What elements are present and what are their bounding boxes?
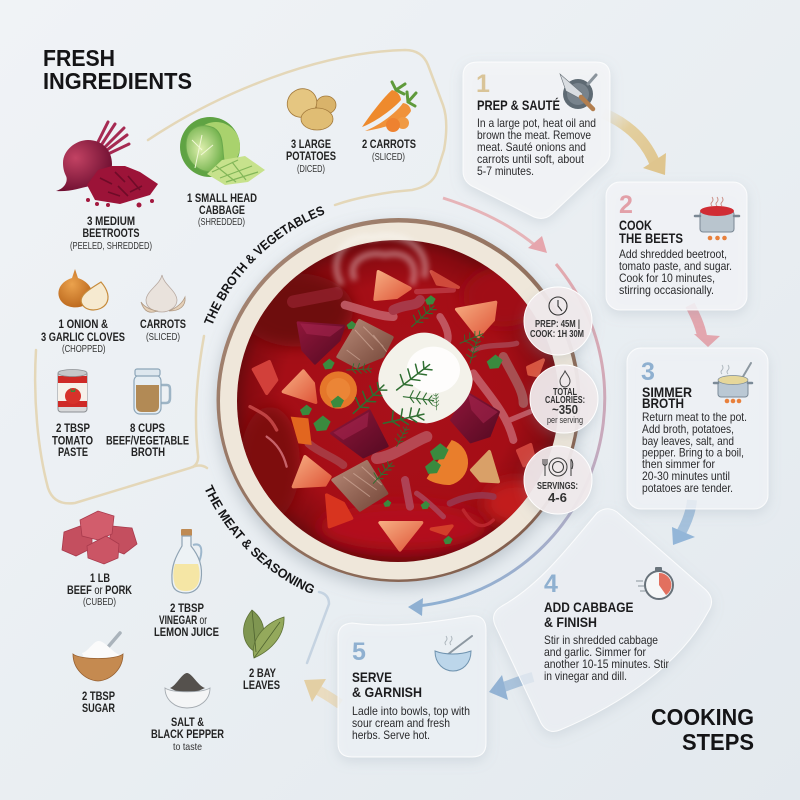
title: cooking steps — [651, 704, 754, 755]
frame: meat and seasoning (blue line) — [307, 592, 329, 663]
icon: beef cubes — [62, 511, 137, 564]
label: beetroots: 3 MEDIUM — [87, 214, 135, 228]
step card 1 — [463, 62, 610, 218]
ingredient: beef or pork — [62, 511, 137, 608]
ingredient: tomato paste — [52, 370, 93, 459]
icon: knife and pan — [560, 74, 596, 109]
step number: 1 — [476, 70, 490, 98]
curved heading: the meat and seasoning: THE MEAT & SEASONING — [205, 484, 314, 593]
step body — [352, 704, 470, 742]
label: tomato paste: TOMATO — [52, 434, 93, 448]
label: carrots: (SLICED) — [372, 151, 405, 163]
step heading — [619, 217, 683, 246]
label: cabbage: (SHREDDED) — [198, 216, 245, 228]
step body: In a large pot, heat oil and — [477, 116, 596, 130]
step arrow: 5 to ingredients — [304, 679, 340, 704]
card panel — [627, 348, 768, 509]
step body: Add shredded beetroot, — [619, 247, 727, 261]
icon: cabbage — [180, 117, 265, 185]
ingredient: cabbage — [180, 117, 265, 228]
label: vinegar or lemon juice: VINEGAR or — [159, 613, 207, 627]
label: onion and garlic — [41, 317, 125, 355]
bowl inner — [220, 222, 577, 580]
step number: 3 — [641, 358, 655, 386]
step heading — [642, 384, 692, 411]
label: onion and garlic: (CHOPPED) — [62, 343, 106, 355]
icon: bay leaves — [244, 610, 284, 658]
label: potatoes — [286, 137, 336, 175]
time text — [530, 319, 584, 340]
label: vinegar or lemon juice: LEMON JUICE — [154, 625, 219, 639]
label: cabbage: CABBAGE — [199, 203, 245, 217]
label: onion and garlic: 3 GARLIC CLOVES — [41, 330, 125, 344]
step body: and garlic. Simmer for — [544, 645, 646, 659]
cabbage ribbons — [250, 290, 530, 526]
bowl rim — [216, 218, 580, 582]
label: sugar — [82, 689, 115, 715]
label: vinegar or lemon juice — [154, 601, 219, 639]
process arc: pink to blue — [408, 198, 605, 616]
sour cream — [378, 333, 473, 423]
card panel — [606, 182, 747, 310]
calories text — [545, 387, 585, 425]
label: onion and garlic: 1 ONION & — [58, 317, 108, 331]
icon: carrots — [362, 82, 416, 132]
step heading: & FINISH — [544, 614, 597, 630]
step body: meat. Sauté onions and — [477, 140, 586, 154]
step heading: BROTH — [642, 395, 684, 411]
curved heading: the broth and vegetables: THE BROTH & VEGETABLES — [204, 206, 324, 324]
label: sugar: 2 TBSP — [82, 689, 115, 703]
label: carrots sliced: CARROTS — [140, 317, 186, 331]
step number: 5 — [352, 638, 366, 666]
step arrow: 3 to 4 — [672, 500, 695, 545]
step body: herbs. Serve hot. — [352, 728, 430, 742]
step body — [477, 116, 596, 178]
icon: sugar bowl — [73, 633, 123, 681]
step body: pepper. Bring to a boil, — [642, 446, 744, 460]
label: broth: BEEF/VEGETABLE — [106, 434, 189, 448]
calories text: per serving — [547, 415, 583, 425]
step body — [642, 410, 747, 495]
label: tomato paste: 2 TBSP — [56, 421, 90, 435]
label: beef or pork — [67, 571, 132, 608]
step body — [544, 633, 669, 683]
step card 4 — [494, 509, 712, 731]
label: vinegar or lemon juice: 2 TBSP — [170, 601, 204, 615]
calories text: TOTAL — [553, 387, 577, 398]
calories text: ~350 — [552, 402, 578, 417]
label: salt and black pepper — [151, 715, 224, 753]
label: salt and black pepper: SALT & — [171, 715, 204, 729]
step body: Cook for 10 minutes, — [619, 271, 715, 285]
stat badge: time — [524, 287, 592, 355]
steam — [336, 236, 425, 285]
label: beetroots: (PEELED, SHREDDED) — [70, 240, 152, 252]
ingredient: salt and black pepper — [151, 673, 224, 753]
icon: potatoes — [282, 83, 336, 130]
dill and herbs — [300, 295, 503, 544]
step body: bay leaves, salt, and — [642, 434, 734, 448]
ingredient: beetroots — [56, 122, 158, 252]
stat badge: calories — [530, 365, 598, 433]
title: cooking steps: STEPS — [682, 729, 754, 755]
label: beetroots: BEETROOTS — [82, 226, 140, 240]
icon: plate and cutlery — [543, 458, 573, 476]
step body: 5-7 minutes. — [477, 164, 534, 178]
icon: pot of beets — [695, 197, 739, 240]
step body: Stir in shredded cabbage — [544, 633, 658, 647]
ingredient: onion and garlic cloves — [41, 269, 125, 355]
label: salt and black pepper: to taste — [173, 741, 202, 753]
beef chunks — [333, 321, 392, 510]
step heading: PREP & SAUTÉ — [477, 97, 560, 113]
step body: in vinegar and dill. — [544, 669, 627, 683]
time text: PREP: 45M | — [535, 319, 580, 330]
step body: another 10-15 minutes. Stir — [544, 657, 669, 671]
step body — [619, 247, 732, 297]
label: salt and black pepper: BLACK PEPPER — [151, 727, 224, 741]
step heading: & GARNISH — [352, 684, 422, 700]
card panel — [338, 616, 486, 757]
label: beef or pork: (CUBED) — [83, 596, 116, 608]
step body: potatoes are tender. — [642, 481, 733, 495]
step body: then simmer for — [642, 457, 715, 471]
servings text: 4-6 — [548, 490, 567, 505]
label: potatoes: POTATOES — [286, 149, 336, 163]
ingredient: sugar — [73, 633, 123, 715]
frame: broth and vegetables (gold outline) — [35, 50, 446, 503]
title: fresh ingredients — [43, 45, 192, 94]
step arrow: 1 to 2 — [603, 113, 666, 175]
step body: 20-30 minutes until — [642, 469, 730, 483]
label: beef or pork: BEEF or PORK — [67, 583, 132, 597]
beet chunks — [298, 323, 499, 457]
soup ingredients — [240, 267, 550, 550]
label: beetroots — [70, 214, 152, 252]
step number: 2 — [619, 191, 633, 219]
ingredient: carrots — [362, 82, 416, 163]
carrot slices — [291, 371, 468, 485]
step arrow: 4 to 5 — [489, 675, 533, 700]
label: carrots sliced — [140, 317, 186, 343]
step body: tomato paste, and sugar. — [619, 259, 732, 273]
label: cabbage — [187, 191, 257, 228]
step number: 4 — [544, 570, 558, 598]
label: tomato paste — [52, 421, 93, 459]
step card 2 — [606, 182, 747, 310]
icon: oil bottle — [172, 529, 202, 593]
title: fresh ingredients: INGREDIENTS — [43, 68, 192, 94]
label: potatoes: 3 LARGE — [291, 137, 331, 151]
step heading: ADD CABBAGE — [544, 599, 634, 615]
step body: brown the meat. Remove — [477, 128, 591, 142]
step body: Ladle into bowls, top with — [352, 704, 470, 718]
label: potatoes: (DICED) — [297, 163, 325, 175]
step body: stirring occasionally. — [619, 283, 714, 297]
label: bay leaves — [243, 666, 280, 692]
label: sugar: SUGAR — [82, 701, 115, 715]
icon: stopwatch — [636, 567, 673, 599]
label: beef or pork: 1 LB — [90, 571, 110, 585]
ingredient: garlic, labelled carrots — [140, 275, 186, 343]
servings text — [537, 481, 578, 505]
step card 5 — [338, 616, 486, 757]
icon: clock — [549, 297, 567, 315]
label: broth: 8 CUPS — [130, 421, 165, 435]
calories text: CALORIES: — [545, 395, 585, 406]
step heading — [352, 669, 422, 700]
title: cooking steps: COOKING — [651, 704, 754, 730]
label: bay leaves: 2 BAY — [249, 666, 276, 680]
potato chunks — [253, 272, 543, 550]
icon: flame — [560, 371, 570, 387]
card panel — [494, 509, 712, 731]
ingredient: broth — [106, 369, 189, 459]
icon: simmering pot — [714, 363, 752, 403]
ingredient: bay leaves — [243, 610, 284, 692]
icon: broth jar — [134, 369, 170, 414]
label: carrots: 2 CARROTS — [362, 137, 416, 151]
step heading: SERVE — [352, 669, 392, 685]
step card 3 — [627, 348, 768, 509]
label: cabbage: 1 SMALL HEAD — [187, 191, 257, 205]
time text: COOK: 1H 30M — [530, 329, 584, 340]
ingredient: potatoes — [282, 83, 336, 175]
label: tomato paste: PASTE — [58, 445, 88, 459]
stat badge: servings — [524, 446, 592, 514]
icon: garlic — [141, 275, 185, 312]
step body: Add broth, potatoes, — [642, 422, 734, 436]
label: carrots — [362, 137, 416, 163]
step heading: THE BEETS — [619, 230, 683, 246]
step heading: SIMMER — [642, 384, 692, 400]
step heading — [544, 599, 634, 630]
icon: pepper bowl — [165, 673, 210, 708]
step body: Return meat to the pot. — [642, 410, 747, 424]
icon: serving bowl — [435, 636, 472, 671]
soup — [237, 240, 559, 562]
servings text: SERVINGS: — [537, 481, 578, 492]
icon: onion — [58, 269, 108, 310]
title: fresh ingredients: FRESH — [43, 45, 115, 71]
label: bay leaves: LEAVES — [243, 678, 280, 692]
icon: tomato can — [58, 370, 87, 412]
label: broth: BROTH — [131, 445, 165, 459]
card panel — [463, 62, 610, 218]
ingredient: vinegar or lemon juice — [154, 529, 219, 639]
icon: beetroot — [56, 122, 158, 208]
step body: carrots until soft, about — [477, 152, 585, 166]
step arrow: 2 to 3 — [690, 305, 720, 347]
step body: sour cream and fresh — [352, 716, 450, 730]
step heading: COOK — [619, 217, 652, 233]
bowl of borscht — [216, 218, 580, 582]
label: broth — [106, 421, 189, 459]
label: carrots sliced: (SLICED) — [146, 331, 180, 343]
